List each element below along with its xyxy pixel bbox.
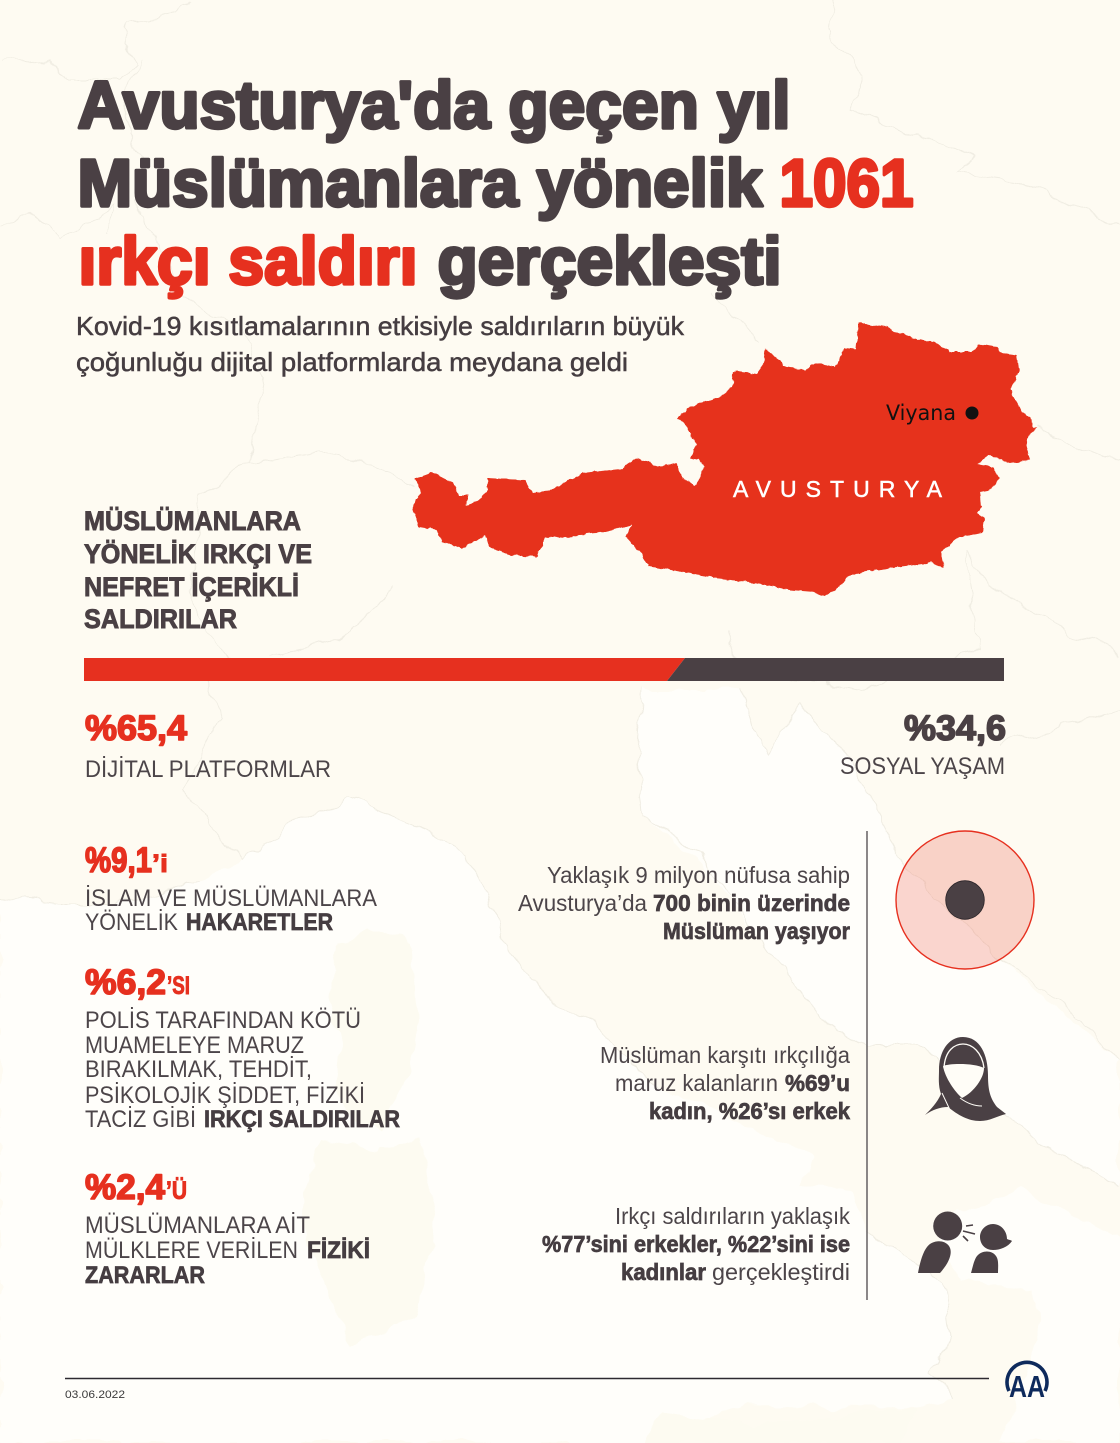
fact: kadin erkek oranı: Müslüman karşıtı ırkçılığa xyxy=(600,1042,850,1068)
logo: AA xyxy=(1007,1362,1047,1404)
stat: fiziki zararlar: FİZİKİ xyxy=(307,1237,370,1264)
stat: sosyal yasam: SOSYAL YAŞAM xyxy=(840,753,1005,780)
fact: kadin erkek oranı xyxy=(600,1042,850,1124)
stacked bar chart xyxy=(84,658,1004,681)
stat: irkci saldirilar xyxy=(85,963,400,1133)
date: 03.06.2022 xyxy=(65,1389,125,1401)
fact: nufus xyxy=(518,862,850,944)
fact: failler xyxy=(542,1203,850,1285)
fact: nufus: 700 binin üzerinde xyxy=(653,890,850,916)
title: gerçekleşti xyxy=(438,224,782,299)
subtitle: çoğunluğu dijital platformlarda meydana geldi xyxy=(76,347,628,377)
stat: irkci saldirilar: ’SI xyxy=(167,972,190,1000)
section heading xyxy=(84,506,312,634)
stat: dijital platformlar: %65,4 xyxy=(85,709,188,748)
stat: fiziki zararlar: MÜSLÜMANLARA AİT xyxy=(85,1212,310,1239)
map: Austria xyxy=(412,323,1037,596)
stat: fiziki zararlar: %2,4 xyxy=(85,1168,166,1207)
stat: fiziki zararlar: ZARARLAR xyxy=(85,1262,205,1289)
stat: hakaretler: ’i xyxy=(152,850,168,878)
section heading: MÜSLÜMANLARA xyxy=(84,506,301,536)
stat: hakaretler: İSLAM VE MÜSLÜMANLARA xyxy=(85,885,377,912)
stat: fiziki zararlar xyxy=(85,1168,370,1289)
section heading: YÖNELİK IRKÇI VE xyxy=(84,539,312,569)
section heading: SALDIRILAR xyxy=(84,604,237,634)
stat: hakaretler xyxy=(85,841,377,936)
stat: fiziki zararlar: ’Ü xyxy=(166,1176,187,1205)
fact: failler: Irkçı saldırıların yaklaşık xyxy=(615,1203,850,1229)
title: Müslümanlara yönelik xyxy=(78,146,763,221)
title: 1061 xyxy=(780,146,914,221)
title: Avusturya'da geçen yıl xyxy=(78,68,790,143)
fact: failler: gerçekleştirdi xyxy=(712,1259,850,1285)
stat: irkci saldirilar: %6,2 xyxy=(85,963,166,1002)
title: ırkçı saldırı xyxy=(78,224,418,299)
fact: failler: kadınlar xyxy=(621,1259,706,1285)
fact: nufus: Avusturya’da xyxy=(518,890,647,916)
stat: hakaretler: HAKARETLER xyxy=(186,909,333,936)
vertical divider xyxy=(866,831,868,1300)
subtitle xyxy=(76,311,685,377)
icon: woman with headscarf xyxy=(925,1037,1006,1121)
stat: fiziki zararlar: MÜLKLERE VERİLEN xyxy=(85,1237,298,1264)
stat: irkci saldirilar: TACİZ GİBİ xyxy=(85,1106,196,1133)
section heading: NEFRET İÇERİKLİ xyxy=(84,572,299,602)
stat: irkci saldirilar: IRKÇI SALDIRILAR xyxy=(204,1106,400,1133)
fact: nufus: Yaklaşık 9 milyon nüfusa sahip xyxy=(547,862,850,888)
map label: Viyana: Viyana xyxy=(886,401,956,425)
fact: failler: %77’sini erkekler, %22’sini ise xyxy=(542,1231,850,1257)
footer rule xyxy=(65,1378,989,1380)
icon: population circle xyxy=(896,831,1034,969)
icon: two people talking xyxy=(918,1212,1012,1273)
stat: sosyal yasam xyxy=(840,709,1006,780)
stat: dijital platformlar: DİJİTAL PLATFORMLAR xyxy=(85,756,331,783)
fact: kadin erkek oranı: %69’u xyxy=(785,1070,850,1096)
stat: irkci saldirilar: MUAMELEYE MARUZ xyxy=(85,1032,304,1059)
stat: irkci saldirilar: PSİKOLOJİK ŞİDDET, FİZİKİ xyxy=(85,1082,365,1109)
logo: AA: AA xyxy=(1009,1369,1045,1404)
stat: hakaretler: %9,1 xyxy=(85,841,152,880)
stat: dijital platformlar xyxy=(85,709,331,783)
stat: irkci saldirilar: POLİS TARAFINDAN KÖTÜ xyxy=(85,1007,361,1034)
fact: kadin erkek oranı: kadın, %26’sı erkek xyxy=(649,1098,850,1124)
map label: Avusturya: AVUSTURYA xyxy=(733,476,943,502)
title xyxy=(78,68,914,299)
subtitle: Kovid-19 kısıtlamalarının etkisiyle saldırıların büyük xyxy=(76,311,685,341)
stat: hakaretler: YÖNELİK xyxy=(85,909,178,936)
fact: nufus: Müslüman yaşıyor xyxy=(663,918,850,944)
stat: sosyal yasam: %34,6 xyxy=(904,709,1006,748)
stat: irkci saldirilar: BIRAKILMAK, TEHDİT, xyxy=(85,1056,312,1083)
fact: kadin erkek oranı: maruz kalanların xyxy=(615,1070,778,1096)
